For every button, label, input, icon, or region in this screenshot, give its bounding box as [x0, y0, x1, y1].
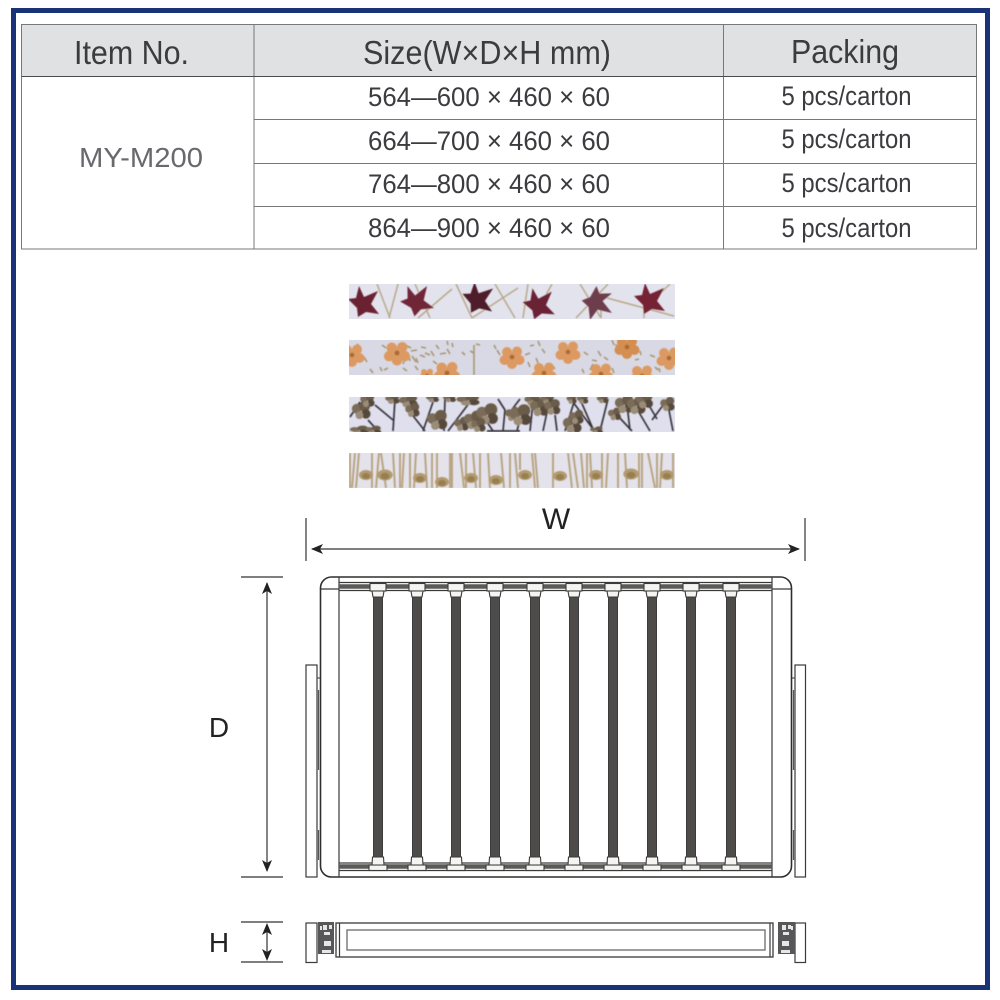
front frame inner panel — [340, 923, 770, 957]
right side runner — [792, 665, 806, 877]
heading: packing: Packing — [791, 33, 899, 70]
rod end connectors — [369, 584, 740, 870]
right end plate — [795, 923, 806, 962]
sizes column: 664—700 × 460 × 60 — [368, 126, 610, 156]
dimension: depth D: D — [209, 712, 229, 743]
spec table — [22, 24, 976, 249]
dimension: height H — [209, 922, 283, 962]
sizes column — [368, 82, 610, 243]
heading: size: Size(W×D×H mm) — [363, 34, 611, 71]
pattern strip: maple leaves — [349, 284, 675, 319]
pattern strip: dark dried stems — [349, 397, 675, 432]
frame inner lines — [320, 577, 792, 877]
packing column: 5 pcs/carton — [782, 81, 912, 111]
basket rods — [374, 597, 736, 857]
heading: item number: Item No. — [74, 34, 189, 71]
packing column: 5 pcs/carton — [782, 213, 912, 243]
left side runner — [306, 665, 320, 877]
pattern strip: orange flowers — [349, 340, 675, 375]
packing column: 5 pcs/carton — [782, 168, 912, 198]
item number value: MY-M200 — [79, 142, 203, 173]
dimension: depth D — [209, 577, 283, 877]
front-view drawing of basket — [306, 922, 806, 962]
front frame — [336, 923, 773, 957]
table grid — [22, 24, 976, 249]
packing column — [782, 81, 912, 243]
right slide mechanism — [778, 922, 795, 954]
dimension: width W — [306, 503, 805, 561]
dimension: width W: W — [542, 503, 571, 536]
left slide mechanism — [318, 922, 334, 954]
table header band — [22, 25, 976, 76]
sizes column: 864—900 × 460 × 60 — [368, 213, 610, 243]
pattern strip: tan stems and seed heads — [349, 453, 675, 488]
packing column: 5 pcs/carton — [782, 124, 912, 154]
sizes column: 764—800 × 460 × 60 — [368, 169, 610, 199]
top-view drawing of basket — [306, 577, 806, 877]
top and bottom rails — [339, 586, 772, 866]
sizes column: 564—600 × 460 × 60 — [368, 82, 610, 112]
left end plate — [306, 923, 317, 962]
dimension: height H: H — [209, 927, 229, 958]
outer frame — [320, 577, 792, 877]
